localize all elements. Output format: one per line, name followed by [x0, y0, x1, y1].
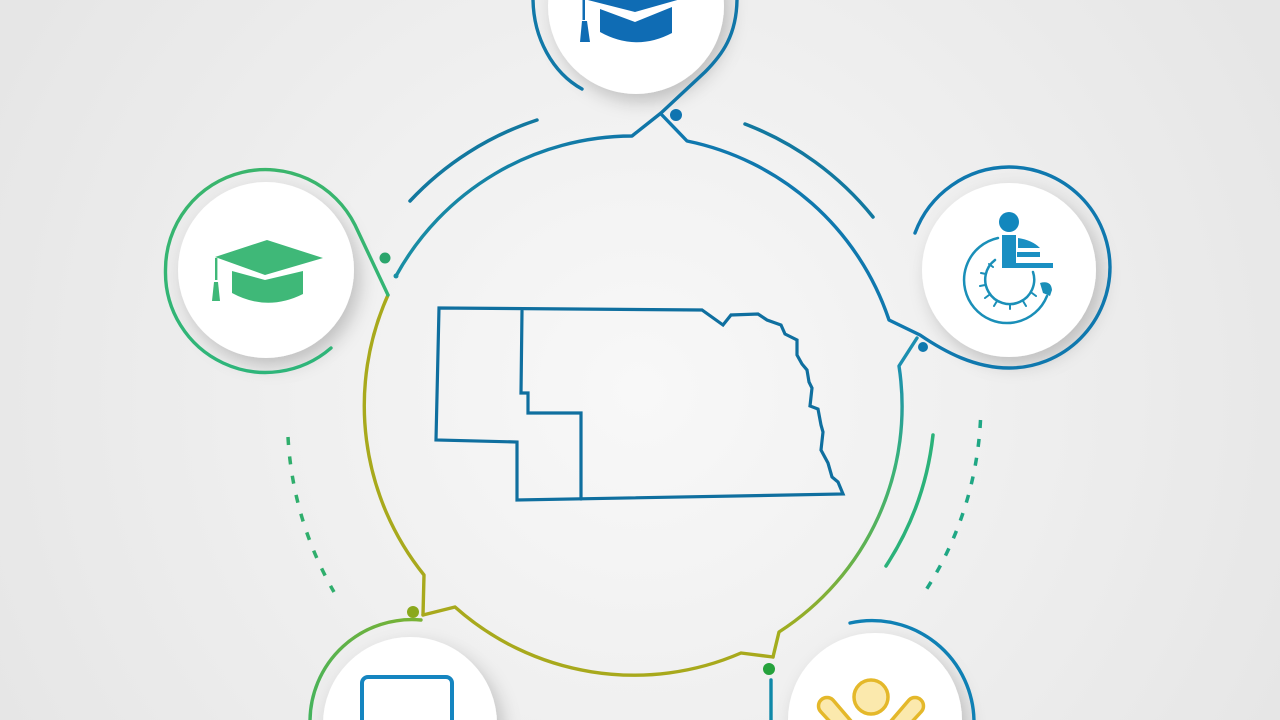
icon: green graduation cap: [212, 240, 323, 303]
white circle: right: [922, 183, 1096, 357]
central ring segments and connector rings: [165, 0, 1110, 720]
icon: blue graduation cap: [568, 0, 695, 42]
ring: bottom right stub: [769, 680, 773, 720]
arc: left: [364, 295, 424, 615]
icon: square outline: [362, 677, 452, 720]
ring: bottom left: [310, 620, 421, 720]
ring: top: [396, 0, 737, 276]
arc: bottom: [423, 607, 773, 675]
white circle: bottom right: [788, 633, 962, 720]
connector dots: [380, 109, 928, 675]
map: Nebraska outline: [436, 308, 843, 500]
white circle: left: [178, 182, 354, 358]
ring: bottom right: [850, 621, 974, 720]
ring: left circle: [165, 170, 388, 372]
arc: lower right: [773, 338, 917, 657]
icon: yellow person: [819, 680, 923, 720]
white circle: bottom left: [323, 637, 497, 720]
white circle: top: [548, 0, 724, 94]
outer arcs: [288, 120, 980, 592]
icon: wheelchair: [964, 212, 1053, 323]
ring: upper right arc and right circle: [662, 115, 1110, 368]
